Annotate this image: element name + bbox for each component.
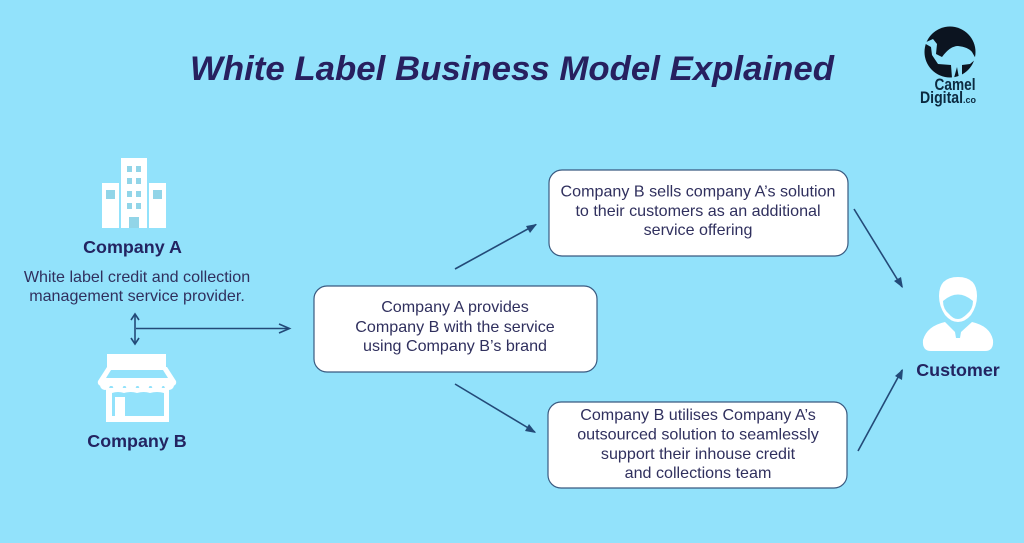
logo: Camel Digital: .co <box>963 95 976 105</box>
panel: Company B sells: Company B sells company A’s solution <box>561 182 835 200</box>
arrow: down to Company B utilises <box>455 384 536 433</box>
heading: Customer: Customer <box>916 360 1000 380</box>
icon: office building <box>102 158 166 228</box>
heading: Company A: Company A <box>83 237 182 257</box>
icon: customer <box>923 277 993 351</box>
arrow: to provider box <box>136 324 290 333</box>
logo: Camel Digital: Camel <box>934 76 976 94</box>
arrow: up to Company B sells <box>455 224 537 269</box>
panel: Company B utilises: Company B utilises Company A’s <box>580 406 816 424</box>
heading: Company B: Company B <box>87 431 187 451</box>
arrow: to customer from top <box>854 209 903 288</box>
arrow: between Company A and Company B <box>131 314 139 344</box>
panel: Company B sells: to their customers as an additional <box>575 202 821 220</box>
text: Company A description: White label credit and collection <box>24 268 250 286</box>
panel: Company A provides: Company B with the service <box>355 318 555 336</box>
panel: Company A provides: using Company B’s brand <box>363 337 547 355</box>
panel: Company B utilises: support their inhouse credit <box>601 445 796 463</box>
logo: Camel Digital <box>920 26 976 107</box>
panel: Company A provides <box>314 286 597 372</box>
title: White Label Business Model Explained <box>190 50 835 88</box>
arrow: to customer from bottom <box>858 369 903 451</box>
panel: Company B sells <box>549 170 848 256</box>
logo: Camel Digital: Digital <box>920 89 963 107</box>
panel: Company B utilises: outsourced solution to seamlessly <box>577 426 820 444</box>
text: Company A description: management service provider. <box>29 287 245 305</box>
panel: Company A provides: Company A provides <box>381 298 529 316</box>
panel: Company B sells: service offering <box>644 221 752 239</box>
panel: Company B utilises: and collections team <box>625 464 771 482</box>
icon: storefront <box>98 354 176 422</box>
panel: Company B utilises <box>548 402 847 488</box>
